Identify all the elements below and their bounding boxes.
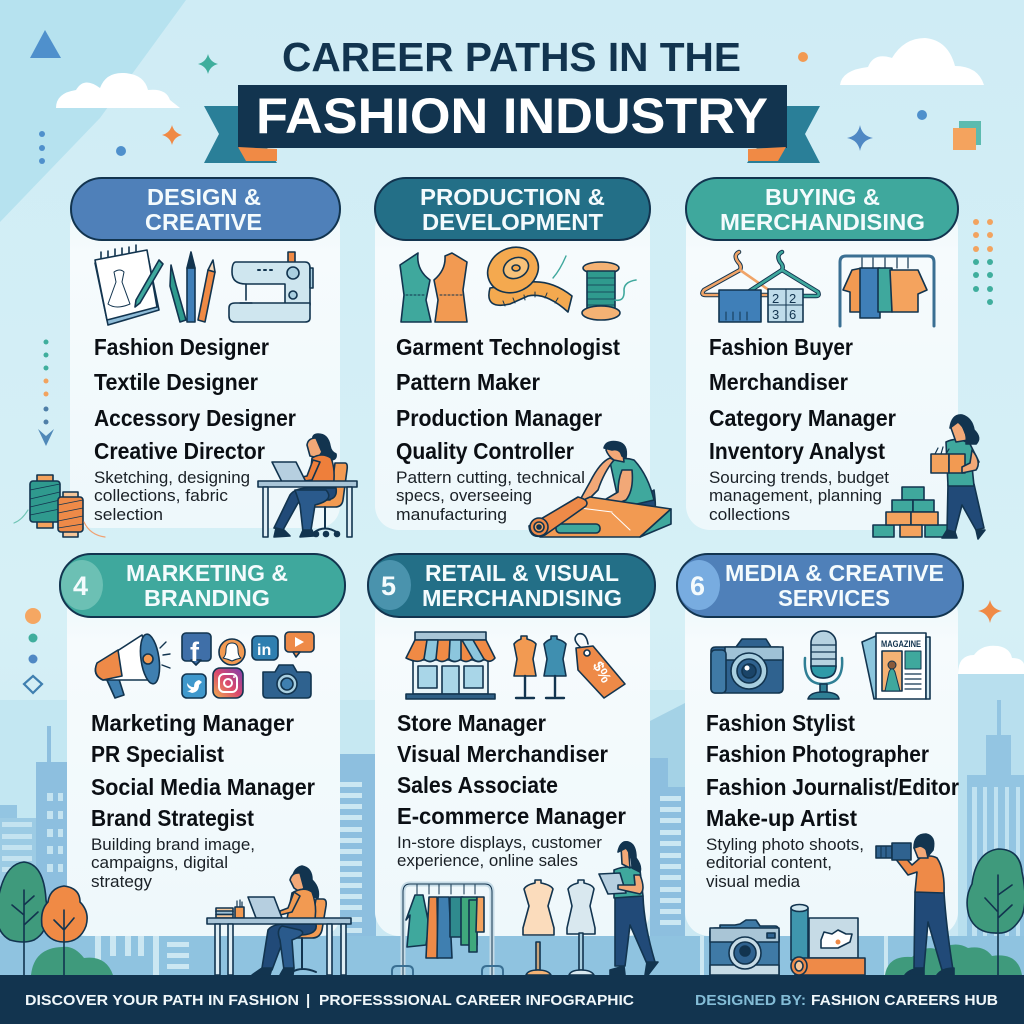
- icon: folded cloth and size tag: 2: [772, 291, 779, 306]
- camera foreground: [710, 920, 779, 975]
- figure: man cutting fabric: [529, 442, 671, 537]
- role list: Marketing Manager: [91, 710, 294, 736]
- role list: Garment Technologist: [396, 334, 620, 360]
- description: editorial content,: [706, 853, 832, 872]
- title line: CAREER PATHS IN THE: [282, 34, 741, 80]
- header: retail and visual merchandising: [368, 554, 655, 617]
- icon: camera: [711, 639, 783, 693]
- description: collections: [709, 505, 790, 524]
- icon: clothing rack: [840, 256, 934, 326]
- role list: Fashion Buyer: [709, 334, 853, 360]
- description: Building brand image,: [91, 835, 255, 854]
- role list: Creative Director: [94, 438, 265, 464]
- description: collections, fabric: [94, 486, 229, 505]
- role list: [91, 710, 315, 831]
- role list: Fashion Journalist/Editor: [706, 774, 959, 800]
- description: [94, 468, 250, 524]
- city skyline background: [0, 673, 1024, 976]
- number badge 5: 5: [381, 571, 396, 601]
- trees and bushes left: [0, 862, 113, 975]
- description: management, planning: [709, 486, 882, 505]
- icon: folded cloth and size tag: 6: [789, 307, 796, 322]
- icon: social media badges: in: [257, 642, 271, 659]
- decorative cloud right: [840, 38, 984, 85]
- role list: Visual Merchandiser: [397, 741, 608, 767]
- fabric roll and pattern poster: [791, 904, 865, 975]
- role list: Fashion Stylist: [706, 710, 855, 736]
- figure: woman with tablet: [599, 842, 658, 975]
- footer bar: FASHION CAREERS HUB: [811, 992, 998, 1009]
- figure: woman carrying box and stacked boxes: [873, 415, 985, 539]
- icon: measuring tape: [480, 239, 572, 312]
- header: media and creative services: [677, 554, 963, 617]
- header: media and creative services: SERVICES: [778, 585, 890, 611]
- panel: design and creative: [14, 178, 357, 537]
- icon: social media badges: f: [190, 637, 200, 667]
- header: marketing and branding: MARKETING &: [126, 560, 288, 586]
- footer bar: PROFESSSIONAL CAREER INFOGRAPHIC: [319, 992, 634, 1009]
- description: [397, 833, 602, 870]
- panel: marketing and branding: [60, 554, 345, 936]
- header: production and development: DEVELOPMENT: [422, 209, 603, 235]
- description: Styling photo shoots,: [706, 835, 864, 854]
- role list: Fashion Photographer: [706, 741, 929, 767]
- decorative shapes: [24, 30, 1002, 693]
- role list: Fashion Designer: [94, 334, 269, 360]
- description: selection: [94, 505, 163, 524]
- header: production and development: [375, 178, 650, 240]
- header: marketing and branding: BRANDING: [144, 585, 270, 611]
- header: retail and visual merchandising: MERCHANDISING: [422, 585, 622, 611]
- panel: retail and visual merchandising: [368, 554, 655, 936]
- role list: [706, 710, 959, 831]
- role list: Merchandiser: [709, 369, 848, 395]
- icon: megaphone: [95, 633, 170, 698]
- header: retail and visual merchandising: RETAIL & VISUAL: [425, 560, 619, 586]
- role list: [397, 710, 626, 829]
- footer bar: DESIGNED BY:: [695, 992, 806, 1009]
- role list: Make-up Artist: [706, 805, 857, 831]
- description: visual media: [706, 872, 801, 891]
- description: Sourcing trends, budget: [709, 468, 889, 487]
- decorative cloud left: [56, 73, 180, 108]
- description: manufacturing: [396, 505, 507, 524]
- figure: photographer: [876, 834, 954, 975]
- role list: Inventory Analyst: [709, 438, 885, 464]
- role list: Sales Associate: [397, 772, 558, 798]
- icon: thread spool: [582, 262, 636, 320]
- panel: media and creative services: [677, 554, 963, 936]
- description: [91, 835, 255, 891]
- header: design and creative: CREATIVE: [145, 209, 262, 235]
- header: design and creative: [71, 178, 340, 240]
- banner title: FASHION INDUSTRY: [256, 88, 768, 144]
- header: buying and merchandising: BUYING &: [765, 184, 880, 210]
- icon: garment pattern pieces: [400, 253, 467, 322]
- icon: microphone: [805, 631, 842, 699]
- icon: mannequins: [514, 636, 566, 698]
- header: design and creative: DESIGN &: [147, 184, 261, 210]
- role list: Textile Designer: [94, 369, 258, 395]
- icon: folded cloth and size tag: 3: [772, 307, 779, 322]
- icon: thread spools: [14, 475, 105, 537]
- panel: buying and merchandising: [686, 178, 985, 539]
- description: experience, online sales: [397, 851, 578, 870]
- header: buying and merchandising: [686, 178, 958, 240]
- icon: magazine: [862, 633, 930, 699]
- number badge 6: [678, 560, 720, 610]
- icon: folded cloth and size tag: 2: [789, 291, 796, 306]
- figure: woman at laptop: [258, 434, 357, 537]
- icon: hangers: [702, 252, 819, 296]
- decorative cloud lower right: [958, 646, 1024, 674]
- description: strategy: [91, 872, 152, 891]
- description: Sketching, designing: [94, 468, 250, 487]
- footer bar: [0, 975, 1024, 1024]
- description: In-store displays, customer: [397, 833, 602, 852]
- header: marketing and branding: [60, 554, 345, 617]
- description: [706, 835, 864, 891]
- icon: sewing machine: [229, 252, 313, 322]
- icon: magazine: MAGAZINE: [881, 639, 921, 650]
- description: campaigns, digital: [91, 853, 228, 872]
- ribbon banner: [204, 85, 820, 163]
- role list: Category Manager: [709, 405, 896, 431]
- header: media and creative services: MEDIA & CREATIVE: [725, 560, 944, 586]
- number badge 5: [369, 560, 411, 610]
- dress forms: [523, 880, 595, 975]
- clothing rack: [392, 884, 503, 975]
- icon: social media badges: [182, 632, 314, 698]
- number badge 4: [61, 560, 103, 610]
- footer bar: |: [306, 992, 310, 1009]
- role list: E-commerce Manager: [397, 803, 626, 829]
- description: specs, overseeing: [396, 486, 532, 505]
- number badge 4: 4: [73, 571, 88, 601]
- role list: [94, 334, 296, 464]
- role list: Quality Controller: [396, 438, 574, 464]
- header: buying and merchandising: MERCHANDISING: [720, 209, 925, 235]
- icon: folded cloth and size tag: [719, 289, 803, 322]
- footer bar: DISCOVER YOUR PATH IN FASHION: [25, 992, 299, 1009]
- role list: Production Manager: [396, 405, 602, 431]
- role list: PR Specialist: [91, 741, 224, 767]
- panel: production and development: [375, 178, 671, 537]
- header: production and development: PRODUCTION &: [420, 184, 605, 210]
- role list: Accessory Designer: [94, 405, 296, 431]
- icon: pencils: [170, 252, 215, 322]
- icon: price tag: [575, 634, 625, 698]
- icon: price tag: $%: [589, 659, 614, 686]
- role list: Social Media Manager: [91, 774, 315, 800]
- description: [709, 468, 889, 524]
- icon: sketchbook and pencil: [95, 245, 163, 325]
- icon: shop front: [406, 632, 495, 699]
- role list: [396, 334, 620, 464]
- role list: Pattern Maker: [396, 369, 540, 395]
- role list: Brand Strategist: [91, 805, 254, 831]
- description: Pattern cutting, technical: [396, 468, 585, 487]
- role list: Store Manager: [397, 710, 546, 736]
- role list: [709, 334, 896, 464]
- figure: woman at desk with books: [207, 866, 351, 975]
- number badge 6: 6: [690, 571, 705, 601]
- tree and bush right: [885, 849, 1024, 975]
- description: [396, 468, 585, 524]
